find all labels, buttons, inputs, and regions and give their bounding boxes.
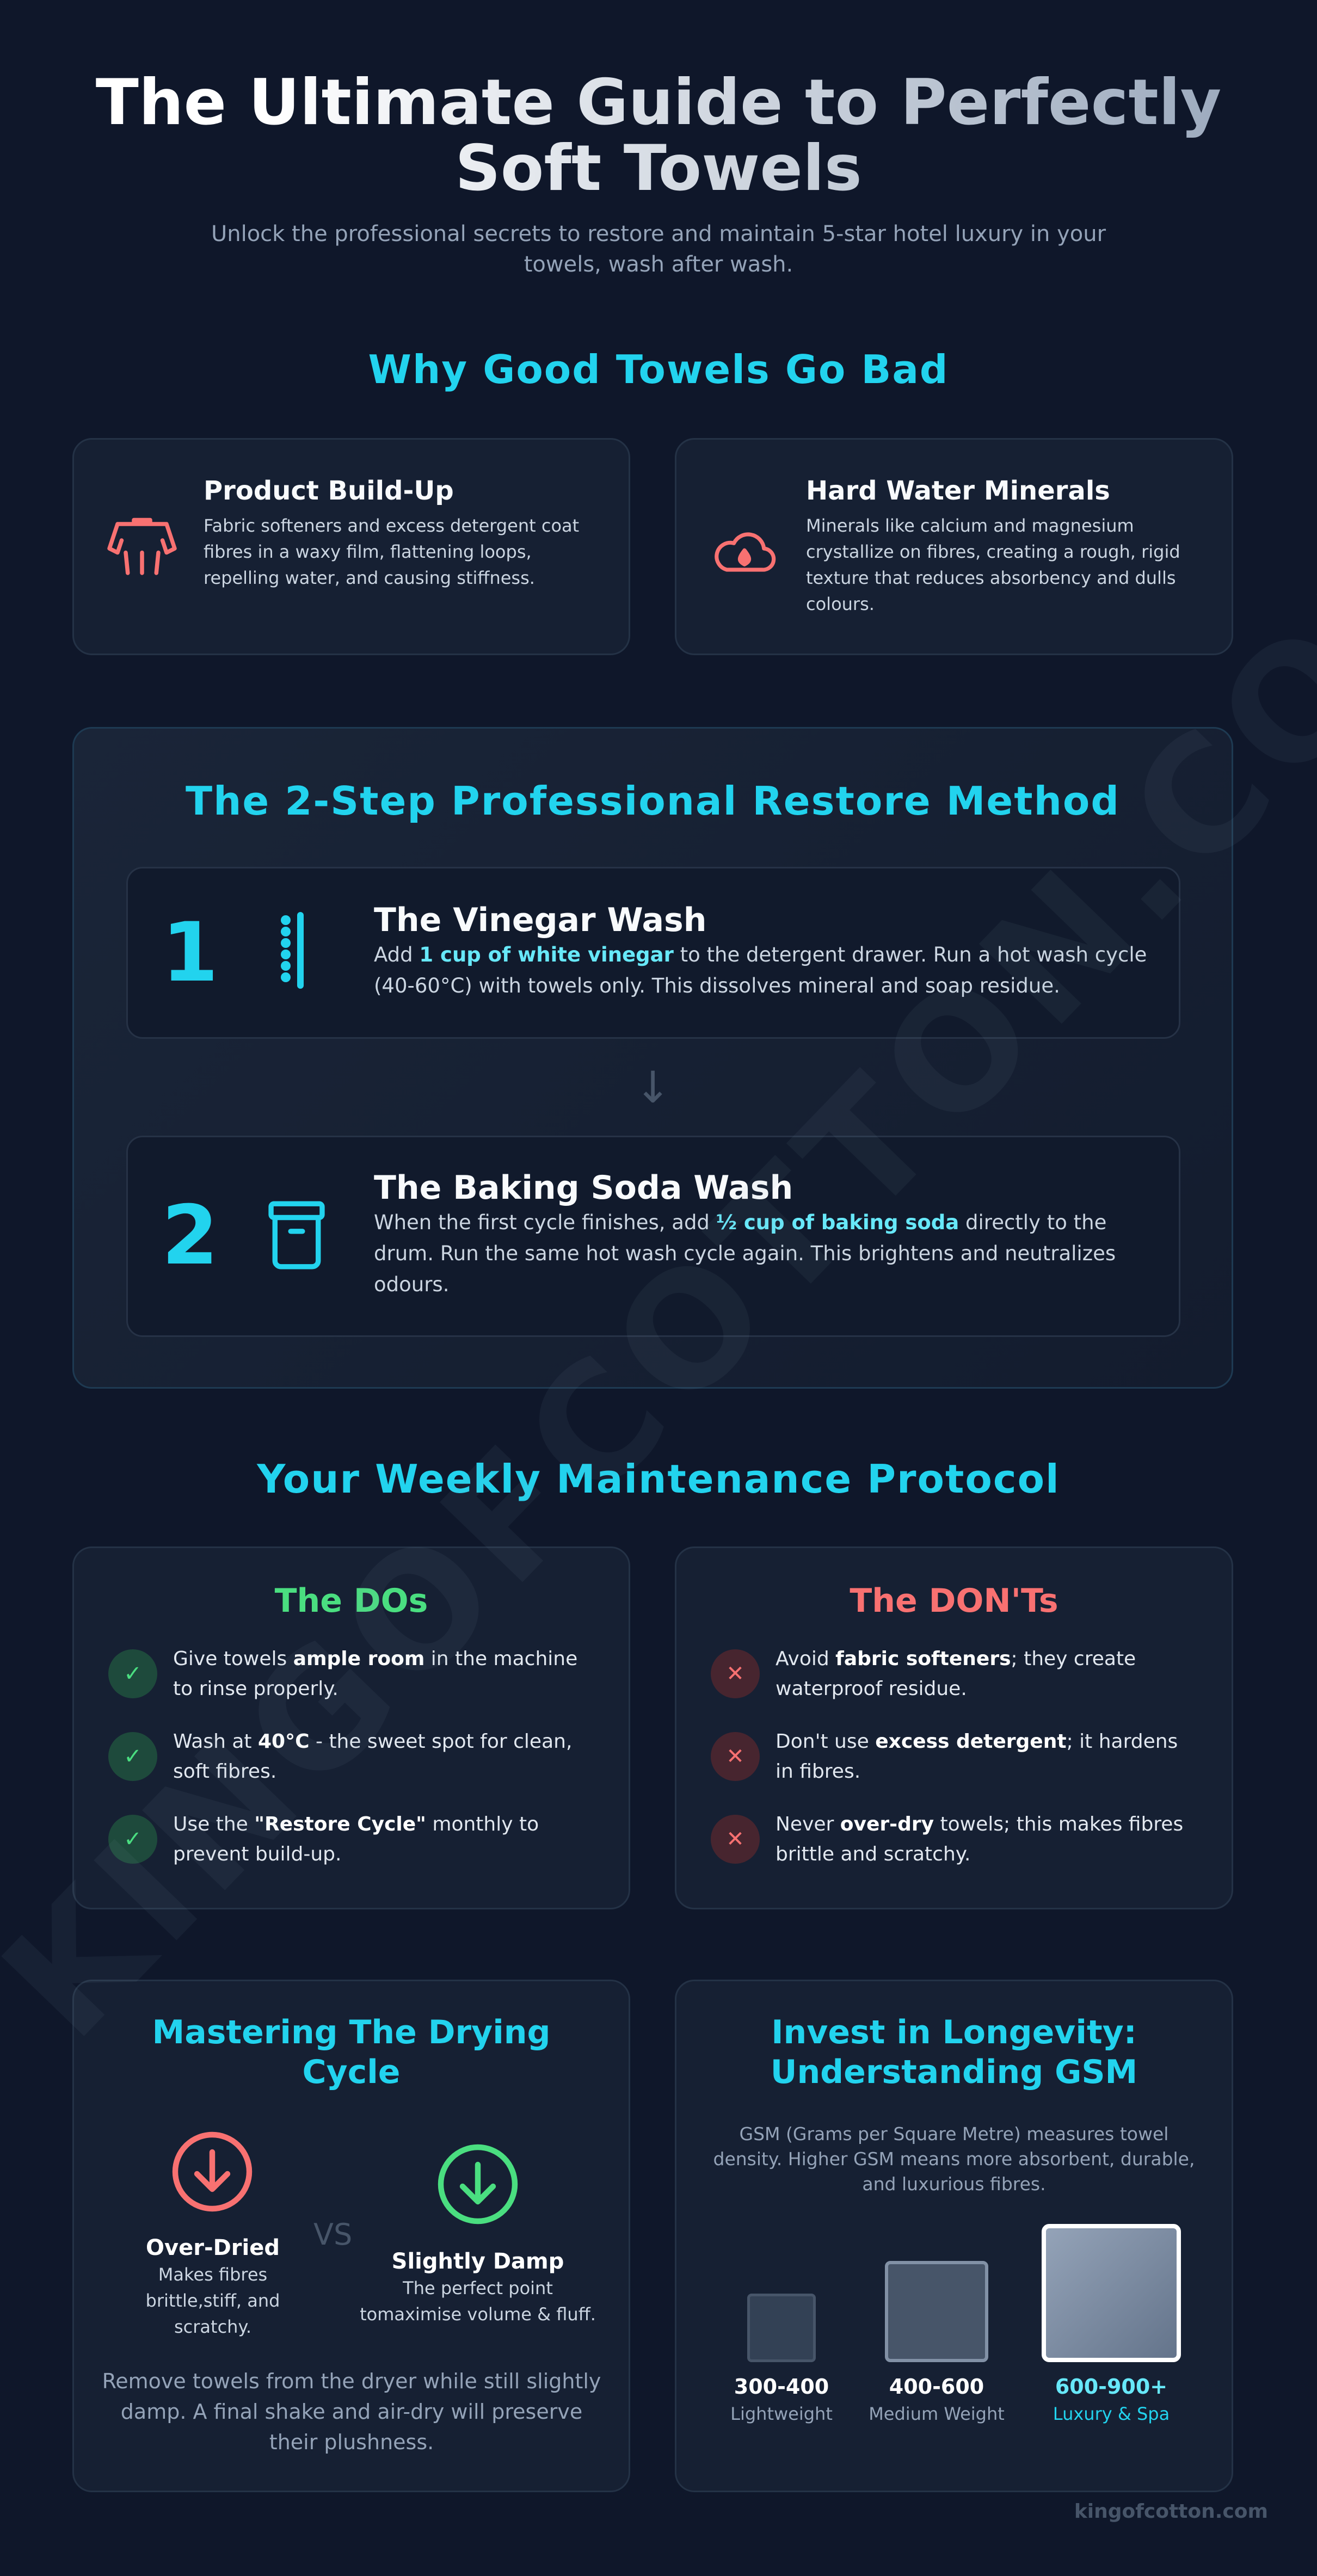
label: 300-400 bbox=[730, 2375, 833, 2424]
panel: restore method bbox=[72, 727, 1233, 1389]
heading: restore method: The 2-Step Professional Restore Method bbox=[186, 778, 1120, 824]
icon: over-dried bbox=[172, 2132, 253, 2211]
panel: hard water minerals bbox=[675, 438, 1233, 655]
title bbox=[0, 70, 1317, 201]
icon: vinegar bbox=[281, 912, 304, 989]
label: 400-600: Medium Weight bbox=[869, 2404, 1005, 2424]
title: Soft Towels bbox=[455, 132, 862, 205]
number 2: 2 bbox=[162, 1188, 218, 1283]
bar: lightweight bbox=[747, 2294, 816, 2362]
panel: DOs: ✓ bbox=[124, 1743, 142, 1768]
text: baking soda wash: The Baking Soda Wash bbox=[374, 1169, 793, 1207]
text: product build-up bbox=[204, 476, 579, 588]
panel: DON'Ts: ✕ bbox=[726, 1661, 744, 1686]
slightly damp text: The perfect point tomaximise volume & fluff. bbox=[360, 2278, 596, 2325]
heading: GSM: Invest in Longevity: bbox=[771, 2013, 1137, 2051]
slightly damp text: Slightly Damp bbox=[392, 2249, 564, 2274]
text: hard water: Minerals like calcium and magnesium crystallize on fibres, creating a rough, rigid texture that reduces absorbency and dulls colours. bbox=[806, 515, 1180, 614]
heading: DOs: The DOs bbox=[275, 1582, 428, 1620]
icon: slightly damp bbox=[438, 2144, 518, 2224]
label: 300-400: Lightweight bbox=[730, 2404, 833, 2424]
panel: GSM bbox=[675, 1980, 1233, 2492]
GSM description: GSM (Grams per Square Metre) measures towel density. Higher GSM means more absorbent, durable, and luxurious fibres. bbox=[713, 2123, 1195, 2195]
title: The Ultimate Guide to Perfectly bbox=[96, 66, 1221, 139]
over-dried text: Makes fibres brittle,stiff, and scratchy. bbox=[146, 2264, 280, 2337]
text: vinegar wash: The Vinegar Wash bbox=[374, 901, 706, 939]
item 2: Wash at 40°C - the sweet spot for clean, soft fibres. bbox=[173, 1730, 572, 1783]
panel: DON'Ts: ✕ bbox=[726, 1743, 744, 1768]
text: vinegar wash: Add 1 cup of white vinegar to the detergent drawer. Run a hot wash cycle (40-60°C) with towels only. This dissolves mineral and soap residue. bbox=[374, 943, 1147, 997]
number 1: 1 bbox=[162, 905, 218, 1000]
chart: GSM squares bbox=[730, 2224, 1181, 2424]
subtitle: Unlock the professional secrets to restore and maintain 5-star hotel luxury in your towels, wash after wash. bbox=[211, 221, 1106, 277]
label: 300-400: 300-400 bbox=[734, 2375, 829, 2399]
item 1: Avoid fabric softeners; they create waterproof residue. bbox=[776, 1648, 1136, 1700]
slightly damp text bbox=[360, 2249, 596, 2325]
label: 600-900+: 600-900+ bbox=[1055, 2375, 1167, 2399]
panel: DOs bbox=[72, 1546, 630, 1909]
over-dried text: Over-Dried bbox=[146, 2235, 280, 2260]
icon: towel build-up bbox=[107, 518, 177, 575]
drying tip: Remove towels from the dryer while still slightly damp. A final shake and air-dry will preserve their plushness. bbox=[102, 2369, 601, 2454]
item 3: Never over-dry towels; this makes fibres brittle and scratchy. bbox=[776, 1813, 1183, 1865]
icon: cloud bbox=[715, 532, 776, 572]
panel: drying cycle bbox=[72, 1980, 630, 2492]
text: product build-up: Fabric softeners and excess detergent coat fibres in a waxy film, flattening loops, repelling water, and causing stiffness. bbox=[204, 515, 579, 588]
arrow: ↓ bbox=[635, 1062, 671, 1113]
label: 400-600 bbox=[869, 2375, 1005, 2424]
item 2: Don't use excess detergent; it hardens in fibres. bbox=[776, 1730, 1178, 1783]
heading: why good towels go bad: Why Good Towels Go Bad bbox=[368, 347, 949, 392]
panel: product build-up bbox=[72, 438, 630, 655]
panel: DOs: ✓ bbox=[124, 1826, 142, 1851]
VS: VS bbox=[313, 2217, 352, 2252]
heading: maintenance protocol: Your Weekly Maintenance Protocol bbox=[257, 1456, 1060, 1502]
heading: GSM bbox=[771, 2013, 1137, 2091]
footer: site: kingofcotton.com bbox=[1074, 2500, 1268, 2523]
bar: luxury bbox=[1042, 2224, 1181, 2362]
text: vinegar wash bbox=[374, 901, 1147, 997]
panel: DON'Ts bbox=[675, 1546, 1233, 1909]
item 1: Give towels ample room in the machine to rinse properly. bbox=[173, 1648, 577, 1700]
text: hard water: Hard Water Minerals bbox=[806, 476, 1110, 506]
label: 600-900+: Luxury & Spa bbox=[1053, 2404, 1170, 2424]
panel: DOs: ✓ bbox=[124, 1661, 142, 1686]
text: baking soda wash bbox=[374, 1169, 1116, 1296]
heading: DON'Ts: The DON'Ts bbox=[850, 1582, 1058, 1620]
heading: drying: Cycle bbox=[303, 2053, 400, 2091]
step 1 bbox=[126, 867, 1180, 1039]
text: baking soda wash: When the first cycle finishes, add ½ cup of baking soda directly to the drum. Run the same hot wash cycle again. This brightens and neutralizes odours. bbox=[374, 1211, 1116, 1296]
panel: DON'Ts: ✕ bbox=[726, 1826, 744, 1851]
item 3: Use the "Restore Cycle" monthly to prevent build-up. bbox=[173, 1813, 539, 1865]
heading: drying bbox=[152, 2013, 550, 2091]
icon: container bbox=[268, 1201, 325, 1269]
label: 400-600: 400-600 bbox=[889, 2375, 984, 2399]
label: 600-900+ bbox=[1053, 2375, 1170, 2424]
bar: medium bbox=[885, 2261, 988, 2362]
heading: drying: Mastering The Drying bbox=[152, 2013, 550, 2051]
text: product build-up: Product Build-Up bbox=[204, 476, 454, 506]
step 2 bbox=[126, 1136, 1180, 1337]
heading: GSM: Understanding GSM bbox=[771, 2053, 1137, 2091]
